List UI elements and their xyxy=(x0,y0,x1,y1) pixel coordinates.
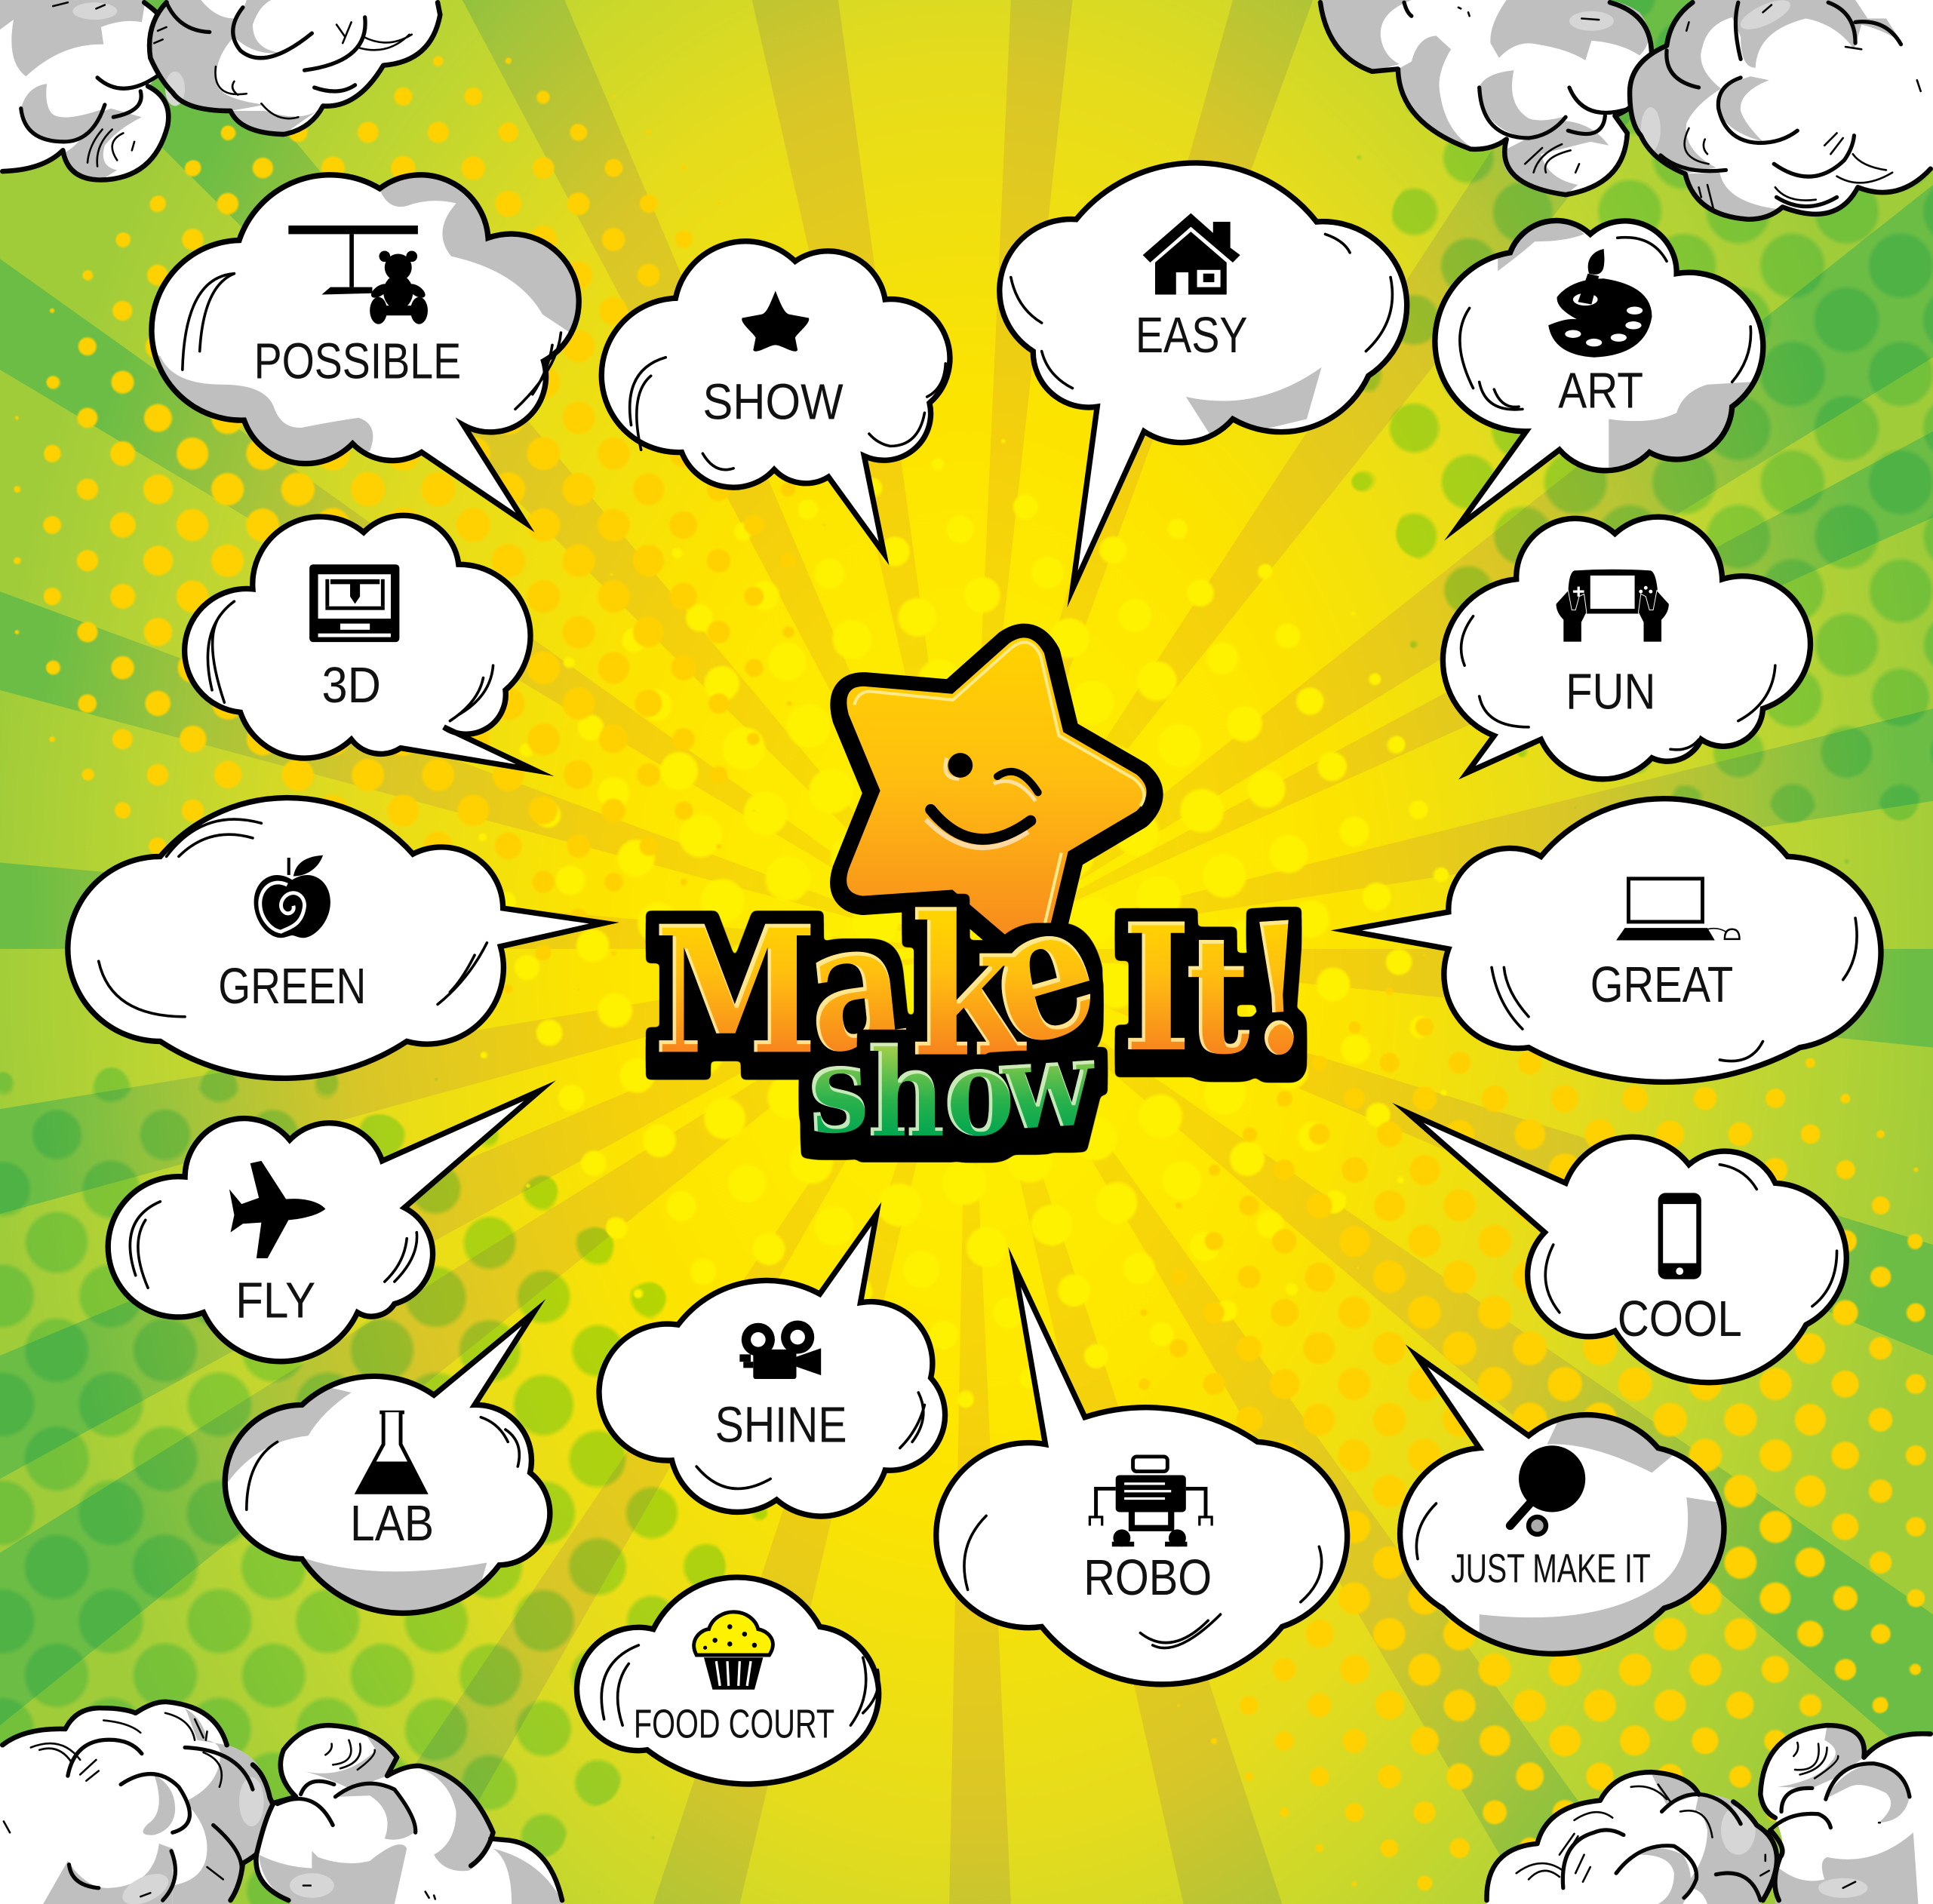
icon: paint palette xyxy=(1548,249,1652,358)
bubble: FLY xyxy=(108,1091,540,1362)
bubble: GREAT xyxy=(1346,799,1881,1082)
label: LAB xyxy=(350,1495,434,1552)
left puff xyxy=(0,1702,276,1904)
logo wordmark: Make It!: M xyxy=(653,889,817,1092)
logo wordmark: Make It!: ! xyxy=(1239,883,1315,1096)
icon: table and teddy bear xyxy=(288,226,428,324)
logo wordmark: Make It!: I xyxy=(1122,886,1191,1090)
icon: ping pong paddle xyxy=(1510,1445,1585,1537)
logo wordmark: show: w xyxy=(997,1010,1098,1158)
left puff xyxy=(0,0,168,180)
label: 3D xyxy=(321,657,381,714)
bubble: ART xyxy=(1435,216,1763,527)
right puff xyxy=(1760,1725,1933,1904)
icon: laptop and mouse xyxy=(1616,879,1739,940)
icon: 3D printer xyxy=(309,564,399,642)
bubble: FOOD COURT xyxy=(576,1577,879,1784)
logo wordmark: show xyxy=(805,1010,1098,1164)
logo wordmark: Make It! xyxy=(653,852,1315,1099)
star face xyxy=(926,753,1038,848)
icon: flask xyxy=(356,1412,426,1494)
label: COOL xyxy=(1618,1291,1742,1347)
logo star mascot xyxy=(847,637,1147,950)
left puff xyxy=(1486,1772,1776,1904)
cloud cluster: top left xyxy=(0,0,440,180)
label: GREAT xyxy=(1590,957,1733,1013)
label: SHINE xyxy=(715,1396,847,1453)
icon: apple with spiral xyxy=(254,855,330,938)
logo wordmark: show: o xyxy=(943,1020,1014,1162)
icon: airplane xyxy=(229,1161,325,1258)
bubble: LAB xyxy=(222,1313,550,1626)
icon: robot xyxy=(1089,1457,1212,1546)
label: JUST MAKE IT xyxy=(1451,1546,1651,1592)
bubble: JUST MAKE IT xyxy=(1400,1356,1726,1663)
label: ROBO xyxy=(1083,1549,1212,1606)
bubble: FUN xyxy=(1443,517,1810,779)
right puff xyxy=(1630,0,1933,220)
logo wordmark: Make It!: a xyxy=(797,875,914,1095)
logo wordmark: Make It!: t xyxy=(1186,899,1249,1090)
label: POSSIBLE xyxy=(254,333,461,390)
cloud cluster: bottom right xyxy=(1486,1725,1933,1904)
label: FOOD COURT xyxy=(634,1701,834,1746)
icon: house xyxy=(1143,213,1240,294)
icon: movie camera xyxy=(739,1320,821,1379)
label: FUN xyxy=(1566,663,1655,720)
bubble: ROBO xyxy=(936,1267,1348,1684)
logo: Make It! show xyxy=(653,637,1315,1164)
label: ART xyxy=(1558,363,1643,419)
logo wordmark: show: h xyxy=(868,1021,945,1164)
bubble: COOL xyxy=(1408,1113,1846,1383)
bubble: GREEN xyxy=(68,798,604,1078)
label: GREEN xyxy=(218,958,366,1015)
logo wordmark: Make It!: e xyxy=(972,852,1114,1092)
cloud cluster: bottom left xyxy=(0,1702,564,1904)
right puff xyxy=(149,0,440,134)
icon: smartphone xyxy=(1658,1193,1701,1279)
bubble: 3D xyxy=(185,515,535,770)
cloud cluster: top right xyxy=(1320,0,1933,220)
label: SHOW xyxy=(702,373,844,430)
left puff xyxy=(1320,0,1652,195)
bubble: EASY xyxy=(1000,163,1407,589)
label: EASY xyxy=(1136,307,1248,364)
bubble: POSSIBLE xyxy=(136,173,579,523)
logo wordmark: show: s xyxy=(805,1015,871,1161)
bubble: SHOW xyxy=(601,241,950,554)
right puff xyxy=(256,1725,564,1904)
bubble: SHINE xyxy=(599,1214,945,1516)
icon: handheld console xyxy=(1556,570,1669,642)
icon: cupcake xyxy=(694,1612,773,1690)
logo wordmark: Make It!: k xyxy=(910,874,1026,1099)
icon: star xyxy=(742,291,809,352)
label: FLY xyxy=(235,1272,315,1328)
